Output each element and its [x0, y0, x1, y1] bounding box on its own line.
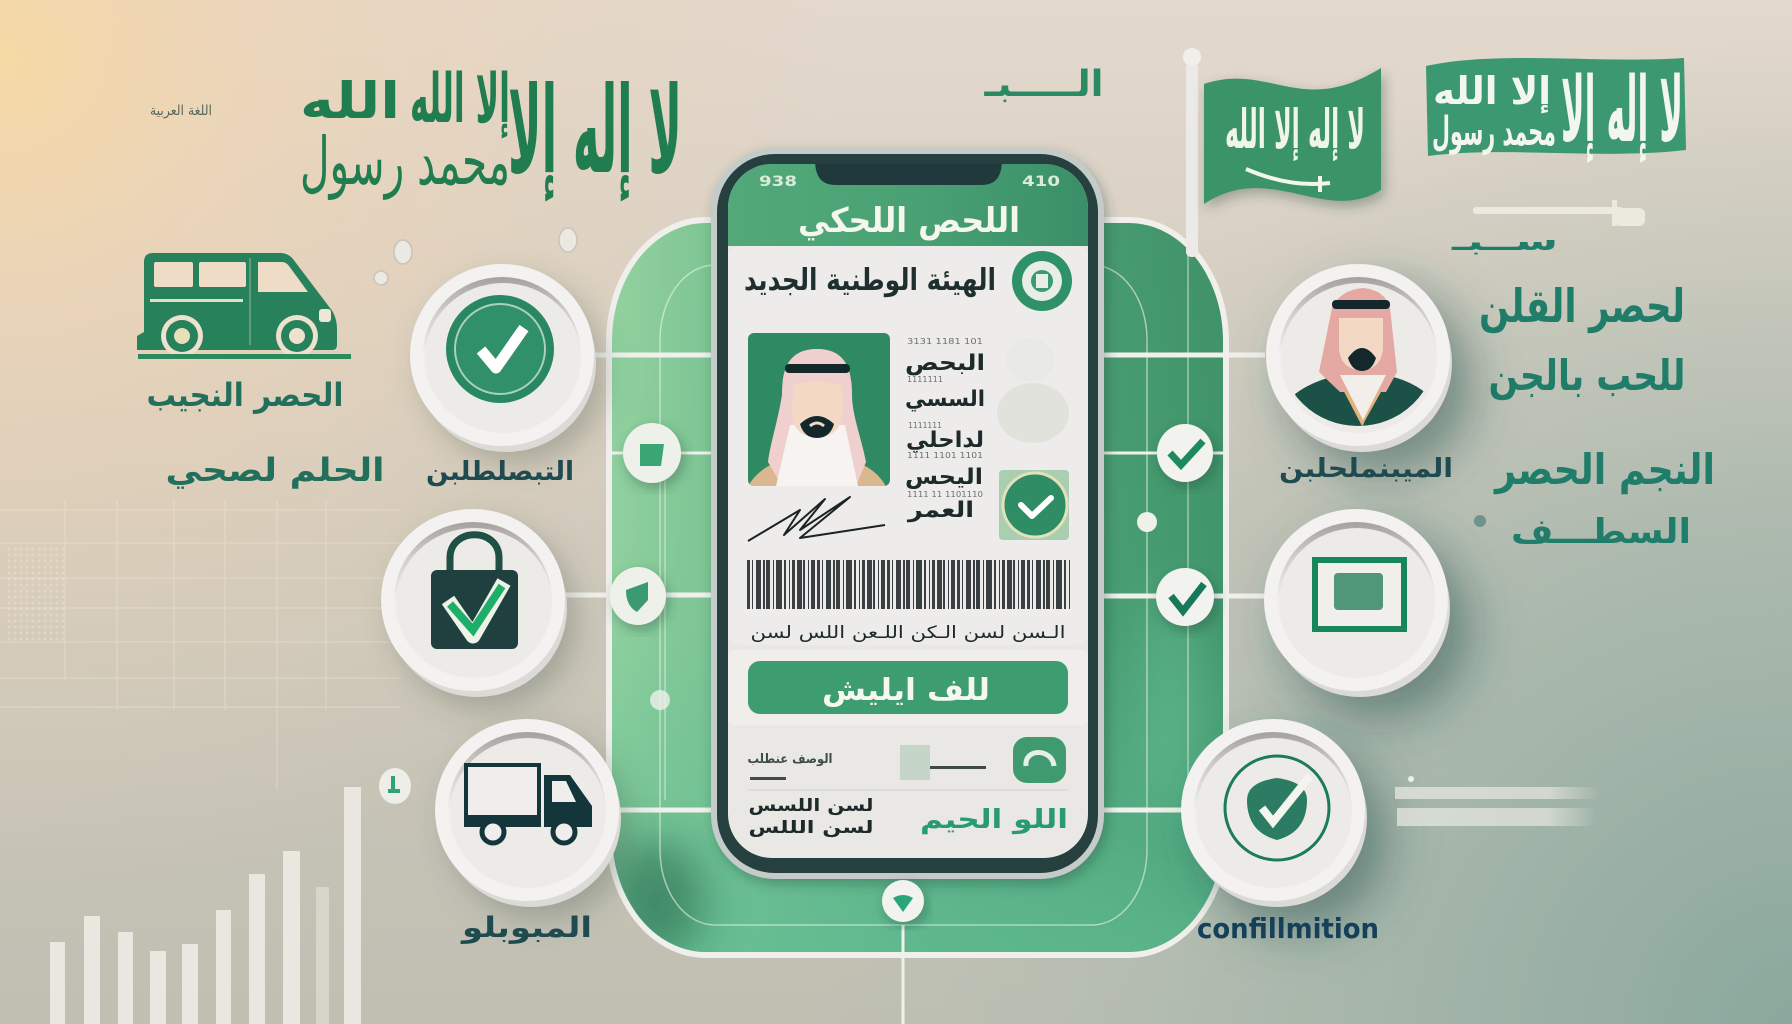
- phone: [711, 148, 1104, 879]
- icon: small badge: [379, 768, 411, 804]
- decorative pins: [374, 228, 577, 285]
- right labels: للحب بالجن: [1488, 351, 1686, 401]
- button: square: [1264, 509, 1450, 697]
- halftone texture patch: [8, 545, 64, 642]
- right labels: السطـــف: [1511, 512, 1691, 552]
- tiny field captions: [907, 337, 983, 499]
- text: لا إله إلا: [508, 62, 682, 202]
- label: person: الميبنملحلبن: [1279, 454, 1453, 484]
- calligraphy: right band: إلا الله: [1433, 69, 1551, 114]
- track node: left upper: [623, 423, 681, 483]
- track node: left lower: [610, 567, 666, 625]
- top center label: الـــــبـ: [983, 64, 1104, 105]
- right labels: [1450, 227, 1715, 552]
- connector lines: [560, 355, 1265, 1024]
- text: لا إله إلا الله: [1225, 98, 1365, 161]
- icon: truck: [466, 765, 592, 843]
- label: confirmation: confillmition: [1197, 912, 1379, 945]
- status right: 410: [1022, 174, 1060, 190]
- watermark seal: [997, 383, 1069, 443]
- ID card: [746, 251, 1072, 642]
- small caption top left: اللغة العربية: [150, 103, 212, 119]
- notch: [815, 164, 1002, 185]
- footer text: لسن اللسس: [748, 796, 874, 816]
- action button: [748, 661, 1068, 714]
- calligraphy: left: إلا الله: [410, 60, 510, 139]
- button: check: [410, 264, 596, 452]
- calligraphy: right band: محمد رسول: [1432, 109, 1556, 155]
- icon: shield check: [1225, 756, 1329, 860]
- button: truck: [435, 719, 621, 907]
- footer green text: اللو الحيم: [920, 805, 1068, 835]
- app title: اللحص اللحكي: [798, 201, 1020, 241]
- portrait photo: [748, 333, 890, 486]
- icon: check badge: [446, 295, 554, 403]
- status left: 938: [759, 174, 797, 190]
- phone screen: [728, 160, 1088, 858]
- card fields: السسي: [905, 387, 985, 412]
- right labels: النجم الحصر: [1493, 445, 1715, 495]
- action panel: [728, 650, 1088, 725]
- footer text: [748, 796, 874, 838]
- calligraphy: left: محمد رسول: [300, 123, 510, 200]
- card fields: اليحس: [905, 465, 983, 490]
- card fields: البحص: [905, 351, 985, 376]
- footer text: لسن الللس: [748, 818, 874, 838]
- divider: [748, 790, 1068, 791]
- calligraphy: left: [300, 60, 682, 202]
- tiny field captions: 1111111: [907, 375, 943, 384]
- signature: [748, 497, 885, 541]
- left labels: [146, 376, 384, 489]
- panel: green track: [605, 217, 1229, 960]
- phone body: [711, 148, 1104, 879]
- small dots: [650, 512, 1157, 710]
- icon: padlock: [431, 535, 518, 649]
- tiny field captions: 1111111: [908, 421, 942, 430]
- dot by label: [1474, 515, 1486, 527]
- left labels: الحصر النجيب: [146, 376, 344, 414]
- card fields: العمر: [907, 498, 974, 523]
- app icon: [1013, 737, 1066, 783]
- label: check: التبصلطلبن: [426, 457, 574, 487]
- flag pole: [1186, 62, 1198, 257]
- faded bars: [1395, 776, 1600, 826]
- info row: [748, 745, 986, 780]
- info row: الوصف عنطلب: [748, 752, 832, 767]
- track node: right lower: [1156, 568, 1214, 626]
- button: confirmation: [1181, 719, 1367, 907]
- tiny field captions: 3131 1181 101: [907, 337, 983, 346]
- phone bezel: [717, 154, 1098, 873]
- card title: الهيئة الوطنية الجديد: [744, 263, 996, 298]
- right labels: لحصر القلن: [1479, 279, 1685, 333]
- track node: bottom: [882, 880, 924, 922]
- calligraphy: left: الله: [300, 72, 400, 130]
- tiny field captions: 1111 11 1101110: [907, 490, 983, 499]
- app header: [728, 164, 1088, 246]
- icon: van: [137, 253, 351, 359]
- calligraphy: right band: [1426, 58, 1686, 163]
- icon: sword bar: [1473, 200, 1645, 226]
- card fields: لداحلي: [906, 428, 984, 453]
- icon: framed square: [1315, 560, 1404, 629]
- card footer text: الـسن لسن الـكن اللـعن اللس لسن: [750, 623, 1066, 643]
- verification stamp: [999, 470, 1069, 540]
- track node: right upper: [1157, 424, 1213, 482]
- pole ball: [1183, 48, 1201, 66]
- flag: [1183, 48, 1381, 257]
- background grid: [0, 500, 400, 790]
- tiny field captions: 1111 1101 1101: [907, 451, 983, 460]
- bar chart: [50, 787, 361, 1024]
- flag sword: [1246, 169, 1330, 192]
- barcode: [747, 560, 1071, 609]
- card fields: [905, 351, 985, 523]
- action button: للف ايليش: [822, 673, 990, 708]
- left labels: الحلم لصحي: [166, 451, 384, 489]
- flag cloth: [1204, 68, 1381, 204]
- icon: person: [1295, 288, 1427, 430]
- seal: [1012, 251, 1072, 311]
- button: person: [1266, 264, 1452, 452]
- button: lock: [381, 509, 567, 697]
- right labels: ســبـ: [1450, 227, 1558, 257]
- label: truck: المبوبلو: [460, 911, 592, 944]
